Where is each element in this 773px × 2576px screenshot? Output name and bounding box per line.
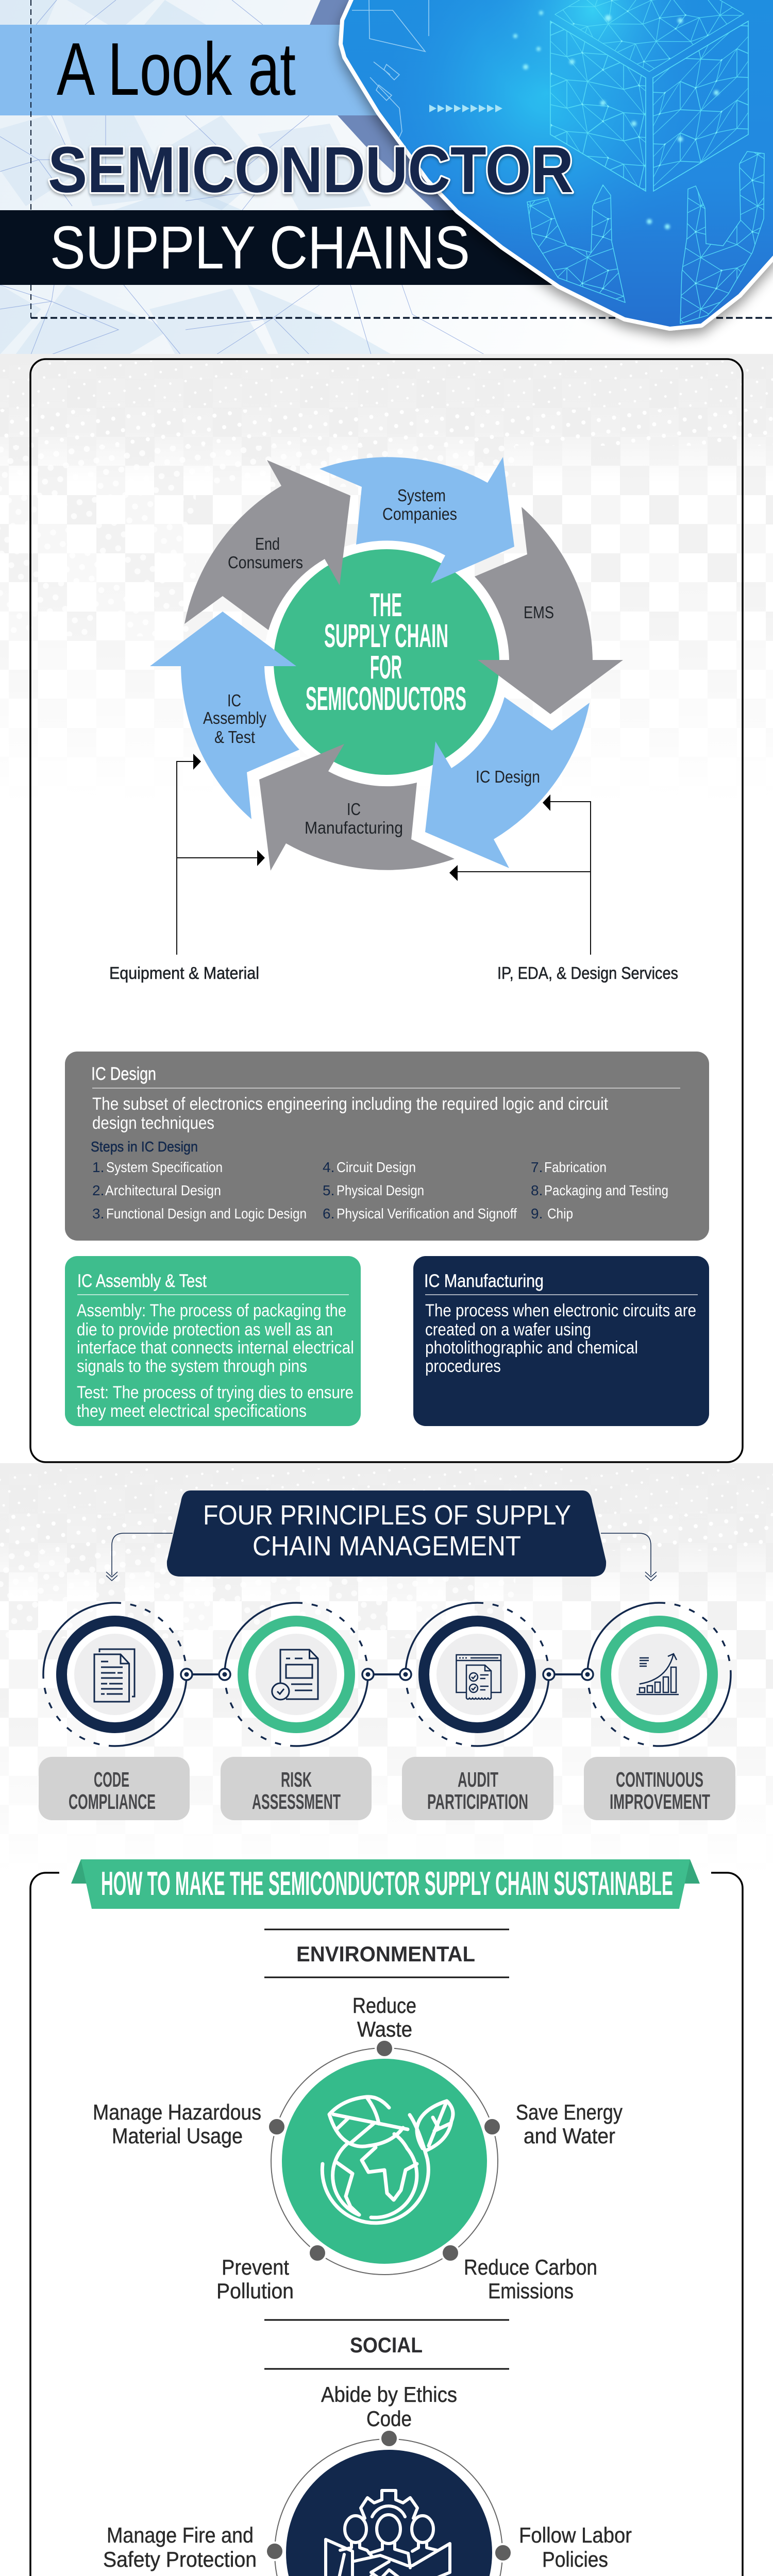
principle: continuous improvement: IMPROVEMENT: [610, 1790, 710, 1814]
steps list: 3.: [92, 1206, 104, 1222]
panel: IC assembly and test: interface that connects internal electrical: [77, 1338, 354, 1358]
panel: IC assembly and test: signals to the system through pins: [77, 1357, 307, 1376]
icon: growth chart: [636, 1654, 679, 1694]
diagram: environmental: Reduce: [352, 1993, 416, 2018]
steps list: Fabrication: [544, 1159, 607, 1175]
connectors: [187, 1673, 587, 1675]
steps list: 6.: [323, 1206, 334, 1222]
principle: code compliance: [39, 1603, 192, 1820]
diagram: social: Policies: [542, 2547, 608, 2571]
arrows: IP, EDA and design services feed: [449, 794, 678, 982]
arrow: system companies: [320, 457, 514, 583]
arrows: equipment and material feed: [109, 754, 265, 982]
steps list: 4.: [323, 1159, 334, 1175]
panel: IC assembly and test: IC Assembly & Test: [77, 1271, 207, 1291]
title: Semiconductor: SEMICONDUCTOR: [48, 133, 574, 206]
light blue title band: [0, 25, 397, 115]
arrow: IC manufacturing: Manufacturing: [305, 818, 403, 837]
steps list: Architectural Design: [105, 1182, 221, 1198]
steps list: Functional Design and Logic Design: [106, 1206, 307, 1222]
arrow: system companies: System: [397, 486, 446, 505]
icon: document with check: [272, 1650, 318, 1700]
principle: audit participation: PARTICIPATION: [427, 1790, 528, 1814]
diagram: environmental: [93, 1993, 623, 2303]
heading banner: CHAIN MANAGEMENT: [253, 1531, 521, 1562]
principle: risk assessment: RISK: [281, 1768, 312, 1791]
title: Supply Chains: SUPPLY CHAINS: [50, 214, 470, 282]
center circle: SEMICONDUCTORS: [306, 680, 466, 717]
background pattern top: [0, 354, 773, 804]
diagram: social: Code: [366, 2406, 412, 2431]
panel: IC manufacturing: [413, 1256, 709, 1426]
diagram: social: Follow Labor: [519, 2523, 632, 2547]
panel: IC assembly and test: Assembly: The process of packaging the: [77, 1301, 346, 1320]
items: [268, 2040, 501, 2262]
panel: IC manufacturing: The process when electronic circuits are: [425, 1301, 696, 1320]
panel: sustainable supply chain: [30, 1859, 743, 2576]
diagram: environmental: Save Energy: [516, 2100, 623, 2124]
background pattern middle: [0, 1463, 773, 1875]
center halo: [264, 539, 509, 785]
arrow: left: [106, 1533, 173, 1581]
arrow: IC assembly and test: & Test: [214, 727, 255, 747]
steps list: Physical Design: [337, 1182, 424, 1198]
steps list: Chip: [547, 1206, 573, 1222]
diagram: social: Safety Protection: [103, 2547, 257, 2571]
steps list: Physical Verification and Signoff: [337, 1206, 517, 1222]
principle: audit participation: AUDIT: [458, 1768, 498, 1791]
steps list: System Specification: [106, 1159, 223, 1175]
header: [0, 0, 773, 361]
diagram: environmental: and Water: [524, 2124, 615, 2148]
diagram: environmental: Material Usage: [112, 2124, 243, 2148]
principle: risk assessment: [219, 1603, 374, 1820]
panel: IC manufacturing: procedures: [425, 1357, 501, 1376]
heading: social: [264, 2320, 509, 2369]
arrows: IP, EDA and design services feed: IP, EDA, & Design Services: [497, 963, 678, 982]
arrow: IC design: IC Design: [476, 767, 540, 786]
panel: IC assembly and test: they meet electrical specifications: [77, 1401, 307, 1421]
steps list: 8.: [531, 1182, 543, 1198]
steps list: Circuit Design: [337, 1159, 416, 1175]
arrow: system companies: Companies: [382, 504, 457, 523]
arrow: IC assembly and test: [150, 612, 299, 819]
icon: gear, team and handshake: [326, 2490, 450, 2576]
heading ribbon: [71, 1859, 700, 1909]
icon: audit checklist: [457, 1655, 501, 1699]
diagram: environmental: Manage Hazardous: [93, 2100, 261, 2124]
diagram: social: Manage Fire and: [107, 2523, 254, 2547]
diagram: social: Abide by Ethics: [321, 2382, 457, 2406]
section: four principles: [39, 1490, 735, 1820]
panel: IC manufacturing: photolithographic and chemical: [425, 1338, 638, 1358]
arrow: EMS: [475, 507, 623, 714]
principle: audit participation: [400, 1603, 554, 1820]
arrow: IC design: [425, 697, 590, 868]
panel: IC design: The subset of electronics engineering including the required logic and circuit: [92, 1094, 608, 1114]
heading banner: FOUR PRINCIPLES OF SUPPLY: [203, 1500, 571, 1531]
arrow: right: [601, 1533, 657, 1581]
arrow: end consumers: Consumers: [228, 553, 303, 572]
icon: documents: [94, 1649, 135, 1702]
diagram: environmental: Reduce Carbon: [464, 2255, 597, 2279]
principle: risk assessment: ASSESSMENT: [252, 1790, 341, 1814]
arrow: IC manufacturing: IC: [347, 800, 361, 819]
icon: globe with leaves: [322, 2097, 453, 2223]
arrow: end consumers: [184, 460, 350, 630]
dark crescent behind artwork: [310, 0, 479, 222]
title: A Look at: A Look at: [57, 27, 296, 111]
arrow: end consumers: End: [255, 534, 280, 553]
heading banner: [167, 1490, 606, 1577]
principle: continuous improvement: CONTINUOUS: [616, 1768, 703, 1791]
diagram: environmental: Waste: [357, 2017, 412, 2041]
arrows: equipment and material feed: Equipment & Material: [109, 963, 259, 982]
principle: code compliance: CODE: [94, 1768, 129, 1791]
panel: IC design: design techniques: [92, 1113, 214, 1133]
diagram: environmental: Emissions: [488, 2279, 574, 2303]
panel: supply chain cycle: [30, 359, 743, 1462]
center circle: [274, 549, 499, 775]
panel: IC assembly and test: [65, 1256, 361, 1426]
principle: continuous improvement: [582, 1603, 735, 1820]
panel: IC design: Steps in IC Design: [91, 1139, 198, 1155]
heading: environmental: ENVIRONMENTAL: [296, 1942, 475, 1966]
arrow: IC manufacturing: [259, 744, 455, 871]
steps list: Packaging and Testing: [544, 1182, 668, 1198]
panel: IC design: IC Design: [91, 1064, 156, 1084]
panel: IC assembly and test: Test: The process of trying dies to ensure: [77, 1383, 354, 1402]
diagram: environmental: Prevent: [222, 2255, 289, 2279]
center circle: THE: [370, 586, 402, 623]
steps list: 7.: [531, 1159, 543, 1175]
panel: IC assembly and test: die to provide protection as well as an: [77, 1320, 333, 1340]
panel: IC manufacturing: created on a wafer using: [425, 1320, 591, 1340]
heading: social: SOCIAL: [350, 2333, 423, 2357]
arrow: IC assembly and test: Assembly: [203, 708, 266, 727]
steps list: [92, 1159, 668, 1222]
panel: IC design: [65, 1052, 709, 1241]
steps list: 5.: [323, 1182, 334, 1198]
diagram: social: [103, 2382, 632, 2576]
items: [266, 2430, 512, 2576]
diagram: environmental: Pollution: [216, 2279, 294, 2303]
center circle: SUPPLY CHAIN: [324, 617, 448, 654]
dark title band: [0, 210, 567, 285]
arrow: IC assembly and test: IC: [227, 691, 241, 710]
circuit artwork leaf: [340, 0, 773, 330]
heading: environmental: [264, 1929, 509, 1977]
arrow: EMS: EMS: [524, 603, 554, 622]
panel: IC manufacturing: IC Manufacturing: [424, 1271, 544, 1291]
steps list: 2.: [92, 1182, 104, 1198]
principle: code compliance: COMPLIANCE: [69, 1790, 156, 1814]
center circle: FOR: [370, 649, 402, 686]
steps list: 1.: [92, 1159, 104, 1175]
steps list: 9.: [531, 1206, 543, 1222]
